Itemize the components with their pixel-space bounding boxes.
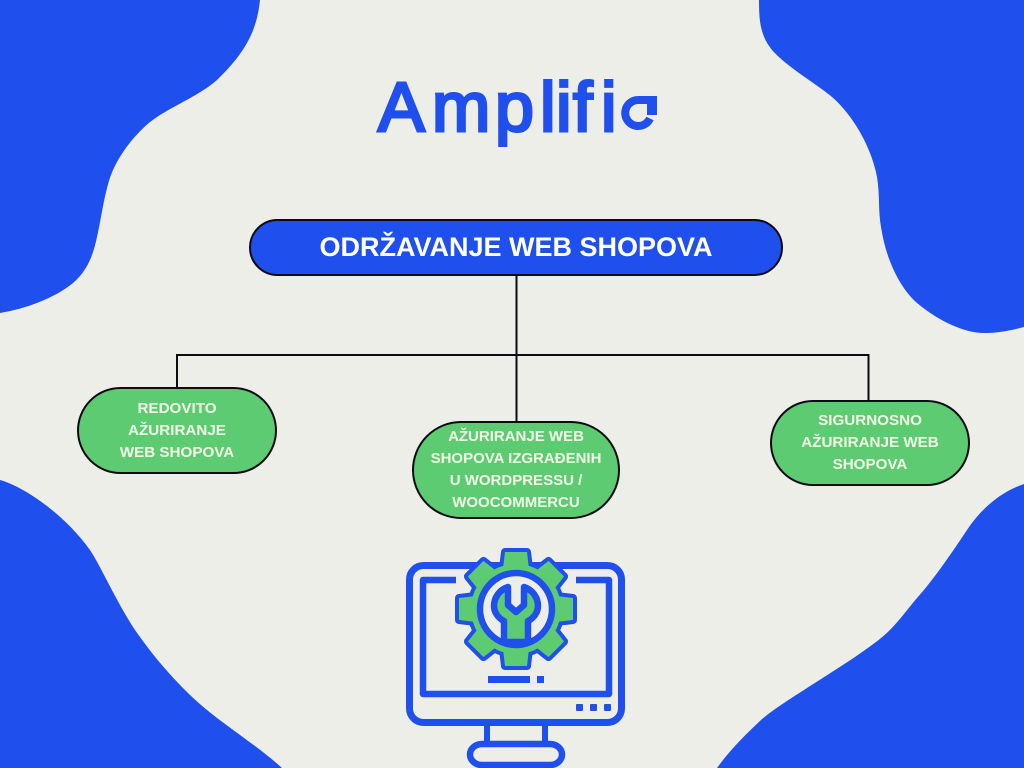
- box: regular updates: REDOVITO: [137, 400, 217, 416]
- monitor stand: [487, 725, 545, 744]
- heading: main title: ODRŽAVANJE WEB SHOPOVA: [319, 232, 713, 262]
- logo: Amplifio: Amplifi: [378, 68, 617, 146]
- box: security updates: AŽURIRANJE WEB: [801, 434, 939, 451]
- monitor frame: [410, 566, 622, 722]
- box: security updates: SIGURNOSNO: [818, 412, 922, 429]
- box: security updates: SHOPOVA: [833, 456, 907, 473]
- wrench: [494, 587, 538, 642]
- box: WordPress updates: AŽURIRANJE WEB: [448, 428, 584, 445]
- box: WordPress updates: [412, 421, 620, 519]
- screen outline: [423, 580, 609, 694]
- box: WordPress updates: WOOCOMMERCU: [452, 494, 580, 511]
- box: WordPress updates: U WORDPRESSU /: [450, 472, 582, 489]
- box: regular updates: WEB SHOPOVA: [120, 444, 234, 460]
- box: regular updates: [77, 387, 277, 474]
- heading: main title: [249, 219, 783, 276]
- box: regular updates: AŽURIRANJE: [128, 422, 226, 438]
- screen bar and dots: [488, 676, 611, 711]
- box: WordPress updates: SHOPOVA IZGRAĐENIH: [431, 450, 601, 467]
- gear: [459, 552, 573, 666]
- box: security updates: [770, 400, 970, 486]
